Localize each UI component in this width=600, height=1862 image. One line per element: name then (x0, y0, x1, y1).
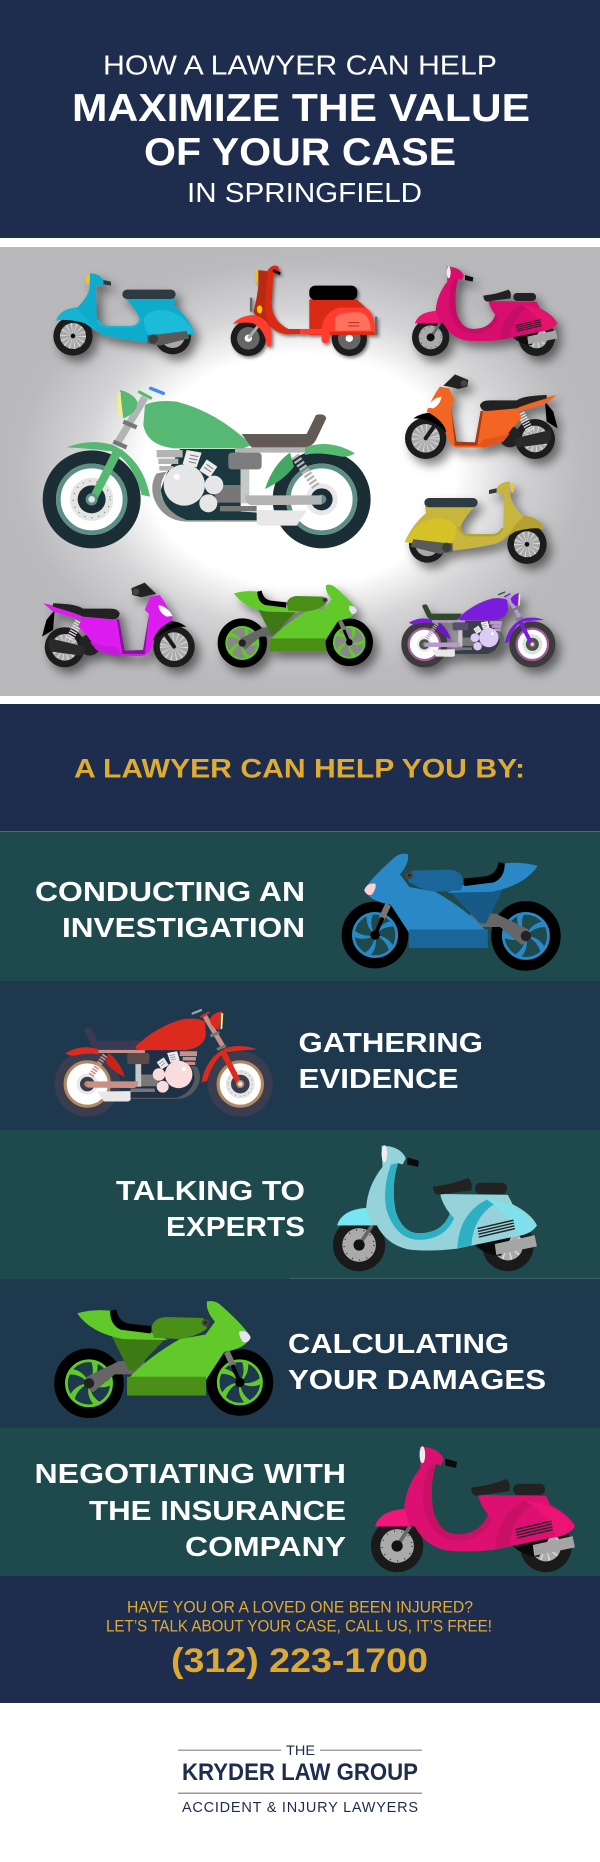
text: negotiating with the insurance company: THE INSURANCE (89, 1495, 346, 1526)
icon: red scooter (231, 266, 377, 356)
icon: aqua scooter (333, 1145, 537, 1271)
title: MAXIMIZE THE VALUE (72, 87, 530, 130)
icon: orange scooter (405, 374, 558, 459)
logo: the kryder law group: ACCIDENT & INJURY LAWYERS (182, 1800, 418, 1816)
icon: magenta scooter (42, 583, 195, 667)
icon: green sport bike row (60, 1301, 268, 1412)
panel: gathering evidence (0, 981, 600, 1130)
footer call to action (0, 1576, 600, 1703)
text: calculating your damages (288, 1328, 546, 1395)
title: HOW A LAWYER CAN HELP (103, 50, 497, 80)
title (72, 50, 530, 208)
call to action text: HAVE YOU OR A LOVED ONE BEEN INJURED? (127, 1598, 473, 1616)
panel: motorcycle collection (0, 247, 600, 696)
call to action text (106, 1598, 492, 1636)
phone number: (312) 223-1700 (171, 1642, 428, 1680)
text: negotiating with the insurance company: COMPANY (185, 1531, 346, 1562)
header band (0, 0, 600, 238)
panel: conducting an investigation (0, 831, 600, 981)
text: talking to experts (116, 1175, 305, 1242)
text: talking to experts: EXPERTS (166, 1211, 305, 1242)
icon: red motorcycle (59, 1010, 268, 1112)
panel: negotiating with the insurance company (0, 1428, 600, 1576)
icon: green sport bike (222, 585, 369, 664)
text: negotiating with the insurance company: NEGOTIATING WITH (34, 1458, 346, 1489)
icon: yellow scooter (405, 482, 547, 564)
text: conducting an investigation: CONDUCTING AN (35, 876, 305, 907)
logo: the kryder law group (178, 1742, 422, 1816)
panel: talking to experts (0, 1130, 600, 1279)
icon: large green motorcycle (49, 388, 364, 542)
icon: hot pink scooter (371, 1446, 575, 1572)
text: calculating your damages: YOUR DAMAGES (288, 1364, 546, 1395)
text: gathering evidence: EVIDENCE (298, 1063, 458, 1094)
subheading band (0, 704, 600, 832)
text: calculating your damages: CALCULATING (288, 1328, 509, 1359)
icon: blue sport bike (347, 854, 555, 965)
text: gathering evidence (298, 1027, 483, 1094)
text: gathering evidence: GATHERING (298, 1027, 483, 1058)
text: conducting an investigation (35, 876, 305, 943)
panel: calculating your damages (0, 1278, 600, 1428)
title: OF YOUR CASE (144, 131, 456, 174)
logo: the kryder law group: THE (286, 1742, 315, 1758)
text: talking to experts: TALKING TO (116, 1175, 305, 1206)
icon: purple motorcycle (404, 592, 552, 664)
icon: teal scooter (53, 273, 195, 356)
call to action text: LET’S TALK ABOUT YOUR CASE, CALL US, IT’S FREE! (106, 1618, 492, 1636)
title: IN SPRINGFIELD (187, 177, 422, 208)
text: negotiating with the insurance company (34, 1458, 346, 1562)
text: conducting an investigation: INVESTIGATION (62, 912, 305, 943)
subheading: A LAWYER CAN HELP YOU BY: (74, 754, 525, 784)
logo: the kryder law group: KRYDER LAW GROUP (182, 1759, 418, 1786)
icon: pink scooter (412, 266, 557, 356)
